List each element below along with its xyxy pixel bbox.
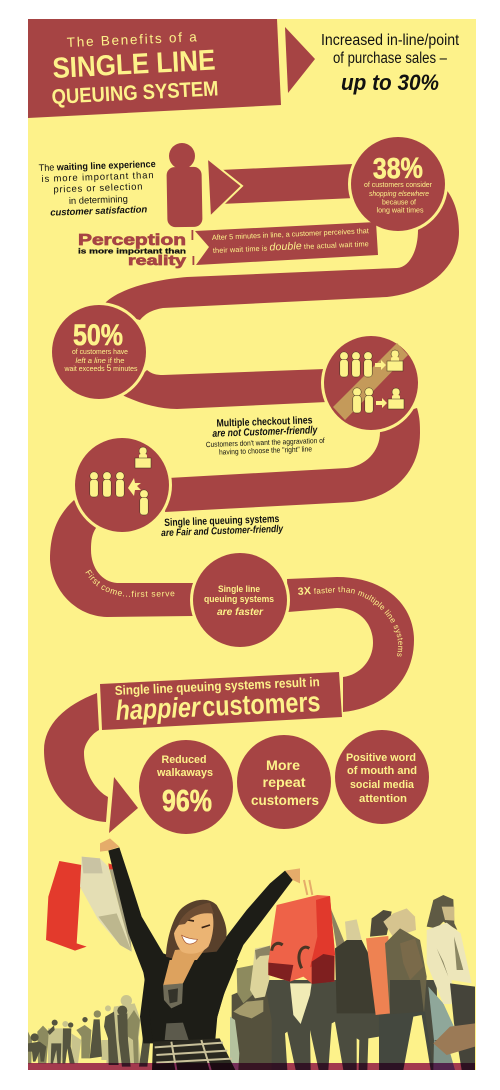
heading: perception: reality: [128, 253, 187, 268]
eyes: [184, 919, 210, 928]
circle: positive word of mouth: attention: [359, 793, 407, 805]
circle: 50%: [49, 302, 149, 402]
face: [174, 912, 213, 954]
circle: multiple lines crossed out: [321, 333, 421, 433]
circle: 50%: of customers have: [72, 347, 128, 356]
heading: perception: [78, 232, 187, 268]
circle: reduced walkaways: 96%: [162, 783, 212, 818]
path segment 2: [120, 369, 327, 409]
text: fair and customer friendly: Single line queuing systems: [164, 513, 280, 529]
title banner: QUEUING SYSTEM: [51, 77, 219, 109]
woman: [100, 838, 300, 1043]
hands: [100, 838, 300, 883]
text: multiple checkout lines: having to choose the "right" line: [219, 444, 312, 457]
arrow: header: [285, 27, 315, 93]
path segment 4: [50, 500, 193, 617]
circle: positive word of mouth: [335, 730, 429, 824]
text: waiting line experience: customer satisfaction: [50, 204, 148, 219]
torso and arms: [108, 847, 293, 1043]
circle: more repeat customers: repeat: [262, 774, 306, 790]
necklace: [162, 983, 182, 1000]
circle: reduced walkaways: [139, 740, 233, 834]
circle: 38%: shopping elsewhere: [369, 189, 429, 198]
circle: 38%: 38%: [373, 153, 423, 185]
circle: 38%: long wait times: [376, 206, 424, 214]
text: multiple checkout lines: Multiple checkout lines: [216, 414, 313, 430]
smile: [182, 935, 197, 944]
hair: [166, 900, 227, 958]
icon: person: [166, 143, 203, 227]
circle: single line faster: queuing systems: [204, 594, 274, 604]
circle: more repeat customers: [237, 735, 331, 829]
banner: wait time perception: [192, 222, 378, 265]
path segment 3: [165, 408, 420, 512]
text: waiting line experience: prices or selection: [53, 181, 143, 196]
shopping bag: right: [268, 880, 335, 984]
text: multiple checkout lines: are not Customer-friendly: [212, 424, 318, 440]
path segment 6: [44, 693, 108, 822]
text: fair and customer friendly: [161, 513, 284, 539]
text: fair and customer friendly: are Fair and Customer-friendly: [161, 524, 284, 539]
circle: single line queue: [72, 435, 172, 535]
title banner: [28, 19, 281, 118]
circle: single line faster: [190, 550, 290, 650]
arrow: to benefits: [109, 777, 138, 833]
circle: reduced walkaways: walkaways: [156, 767, 213, 779]
banner: happier customers: Single line queuing systems result in: [114, 674, 320, 698]
ground strip: [28, 1063, 475, 1070]
neck and chest: [172, 950, 204, 960]
banner: wait time perception: After 5 minutes in line, a customer perceives that: [212, 226, 369, 242]
banner: happier customers: happier customers: [115, 686, 321, 726]
circle: positive word of mouth: of mouth and: [347, 765, 417, 777]
path segment 5: [287, 577, 414, 712]
circle: positive word of mouth: Positive word: [346, 752, 416, 764]
fringe: [178, 903, 214, 925]
callout: increased sales: up to 30%: [341, 70, 439, 95]
text: multiple checkout lines: [205, 414, 326, 457]
top and skirt details: [141, 960, 238, 1070]
circle: 50%: wait exceeds 5 minutes: [64, 363, 138, 373]
heading: perception: is more important than: [78, 248, 186, 256]
crowd: right side: [230, 895, 475, 1070]
callout: increased sales: [321, 32, 460, 95]
arrow: person to 38%: [207, 158, 355, 217]
circle: 38%: because of: [382, 198, 417, 206]
text: waiting line experience: The waiting line experience: [39, 159, 156, 174]
title banner: The Benefits of a: [66, 29, 197, 50]
circle: single line faster: Single line: [218, 584, 260, 594]
illustration: happy shopper and crowd: [28, 838, 475, 1070]
circle: reduced walkaways: Reduced: [162, 754, 206, 766]
circle: positive word of mouth: social media: [350, 779, 415, 791]
circle: 38%: [348, 134, 448, 234]
text: multiple checkout lines: Customers don't want the aggravation of: [206, 436, 326, 449]
text: waiting line experience: is more important than: [41, 170, 154, 185]
circle: more repeat customers: customers: [251, 792, 319, 808]
crowd: distant left: [28, 995, 151, 1067]
curved text: first come first serve: First come...first serve: [85, 570, 174, 597]
banner: wait time perception: their wait time is double the actual wait time: [213, 237, 369, 256]
curved text: 3x faster: 3X faster than multiple line systems: [298, 586, 403, 657]
circle: 38%: of customers consider: [364, 180, 432, 189]
banner: happier customers: [100, 672, 342, 730]
title banner: SINGLE LINE: [52, 45, 216, 85]
crowd gaps: [285, 1015, 431, 1070]
callout: increased sales: of purchase sales –: [333, 50, 447, 67]
circle: 50%: left a line if the: [76, 356, 124, 365]
circle: more repeat customers: More: [266, 757, 300, 773]
text: waiting line experience: [39, 159, 157, 219]
callout: increased sales: Increased in-line/point: [321, 32, 460, 49]
text: waiting line experience: in determining: [69, 194, 128, 207]
circle: 50%: 50%: [73, 319, 123, 352]
path segment 1: [100, 188, 459, 320]
shopping bags: left: [46, 857, 132, 952]
circle: single line faster: are faster: [217, 606, 264, 618]
heading: perception: Perception: [78, 232, 186, 249]
